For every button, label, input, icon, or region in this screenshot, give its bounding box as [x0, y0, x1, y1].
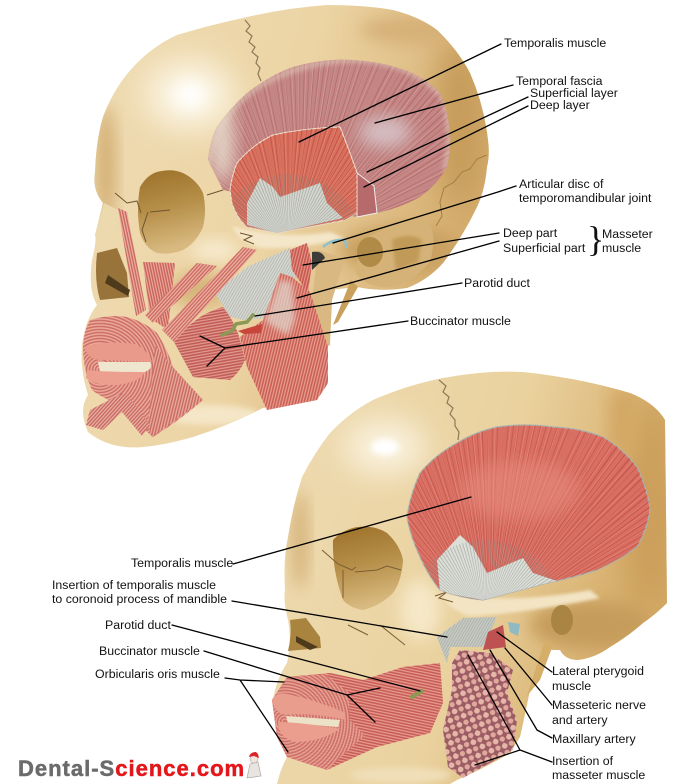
bottom skull: cranium and mandible	[273, 372, 667, 784]
bottom skull: facial sutures	[322, 550, 453, 645]
orbicularis oris and lower facial muscles	[83, 316, 203, 437]
callout: bottom buccinator	[99, 644, 380, 722]
callout: insertion of masseter: Insertion of	[552, 754, 614, 768]
masseter insertion area	[443, 650, 517, 778]
levator anguli fan	[143, 262, 175, 330]
callout: insertion of temporalis: Insertion of temporalis muscle	[52, 578, 216, 592]
label: masseter muscle: Masseter	[602, 227, 653, 241]
top skull: condyle and ramus	[312, 250, 345, 350]
masseter superficial part	[240, 273, 328, 410]
callout: orbicularis oris: Orbicularis oris muscle	[95, 667, 220, 681]
callout: bottom parotid duct	[105, 618, 420, 691]
upper lip	[84, 343, 152, 362]
top temporalis: fibres	[230, 127, 357, 233]
callout: insertion of masseter	[468, 655, 645, 782]
bottom skull: orbit	[333, 527, 403, 610]
top temporalis: tendon	[247, 178, 343, 233]
top skull: facial sutures	[115, 190, 254, 244]
callout: masseteric nerve: and artery	[552, 713, 608, 727]
callout: superficial part: Superficial part	[503, 241, 586, 255]
callout: articular disc: Articular disc of	[519, 177, 604, 191]
mandibular tendon insertion	[437, 617, 497, 663]
callout: bottom temporalis: Temporalis muscle	[131, 556, 233, 570]
bottom facial muscles	[272, 663, 443, 770]
callout: maxillary artery: Maxillary artery	[552, 732, 637, 746]
callout: insertion of temporalis: to coronoid process of mandible	[52, 592, 227, 606]
callout: buccinator muscle	[200, 314, 511, 366]
bottom temporalis muscle	[406, 424, 651, 601]
callout: superficial layer: Superficial layer	[530, 86, 618, 100]
bottom orbicularis rings	[272, 674, 365, 770]
callout: deep part	[303, 226, 558, 265]
callout: parotid duct	[255, 276, 530, 316]
callout: buccinator muscle: Buccinator muscle	[410, 314, 511, 328]
lateral pterygoid muscle	[483, 625, 506, 650]
callout: orbicularis oris	[95, 667, 288, 752]
top skull: base hollows	[392, 236, 422, 270]
masseter tendon	[215, 248, 296, 320]
masseter deep part	[290, 243, 312, 293]
callout: lateral pterygoid	[497, 632, 644, 693]
callout: masseteric nerve	[505, 648, 646, 727]
lower lip	[86, 370, 145, 385]
callout: deep layer: Deep layer	[530, 98, 590, 112]
callout: articular disc: temporomandibular joint	[519, 191, 652, 205]
brace: }	[587, 219, 604, 259]
top temporalis muscle	[230, 126, 358, 234]
top skull illustration	[82, 5, 489, 447]
callout: bottom parotid duct: Parotid duct	[105, 618, 171, 632]
levator labii muscle	[118, 208, 146, 316]
deep layer strip	[340, 127, 377, 217]
callout: bottom buccinator: Buccinator muscle	[99, 644, 200, 658]
bottom skull: mastoid hollow	[551, 605, 573, 635]
top skull: nasal aperture shadow	[105, 275, 130, 296]
top skull: parietal suture	[436, 155, 487, 226]
callout: temporal fascia: Temporal fascia	[516, 74, 603, 88]
bottom temporalis: tendon	[437, 535, 563, 600]
top skull: zygomatic arch	[232, 226, 345, 248]
callout: temporal fascia	[375, 74, 603, 123]
zygomaticus minor muscle	[145, 263, 217, 323]
callout: insertion of masseter: masseter muscle	[552, 768, 645, 782]
parotid duct	[222, 315, 253, 335]
callout: superficial part	[297, 241, 586, 298]
bottom skull: coronal suture	[439, 380, 459, 440]
top skull: mastoid and cranial base	[355, 215, 433, 287]
masseter tendon blend	[265, 280, 295, 335]
chin strand	[86, 392, 150, 436]
icon: doctor	[247, 752, 261, 778]
pterygoid blue structure	[508, 622, 520, 636]
teeth	[98, 362, 151, 372]
callout: lateral pterygoid: Lateral pterygoid	[552, 664, 644, 678]
dark opening behind deep masseter	[312, 252, 325, 270]
bottom skull: shading	[292, 390, 676, 783]
bottom skull: nasal cavity	[288, 618, 321, 651]
bottom skull: zygomatic arch	[440, 590, 600, 616]
top skull: coronal suture	[245, 20, 261, 81]
callout: temporalis muscle	[299, 36, 606, 142]
top skull: mastoid hollow	[357, 237, 383, 267]
label: masseter muscle: muscle	[602, 241, 641, 255]
callout: deep layer	[364, 98, 590, 187]
top skull: styloid process	[333, 280, 358, 325]
callout: masseteric nerve: Masseteric nerve	[552, 698, 646, 712]
bottom teeth	[286, 716, 340, 727]
callouts: top skull	[200, 36, 653, 366]
temporal fascia	[208, 60, 450, 217]
articular disc	[323, 240, 346, 248]
label: masseter muscle	[602, 227, 653, 255]
buccinator muscle	[173, 307, 245, 380]
bottom lower lip	[278, 722, 340, 742]
bottom temporalis: fibres	[407, 425, 650, 600]
bottom skull illustration	[272, 372, 676, 784]
cut parotid vessel	[238, 324, 262, 334]
top skull: shading	[96, 16, 484, 425]
bottom upper lip	[272, 693, 346, 720]
callout: bottom temporalis	[131, 497, 471, 570]
parotid duct stump	[412, 691, 422, 697]
top skull: orbit	[138, 170, 205, 254]
bottom skull: nasal aperture shadow	[296, 636, 318, 650]
depressor strand	[148, 345, 203, 437]
callout: superficial layer	[367, 86, 618, 172]
callouts: bottom skull	[52, 497, 646, 782]
callout: parotid duct: Parotid duct	[464, 276, 530, 290]
callout: insertion of temporalis	[52, 578, 447, 637]
callout: lateral pterygoid: muscle	[552, 679, 591, 693]
bottom skull: styloid process	[527, 640, 553, 696]
top skull: nasal bone	[95, 203, 122, 245]
top skull: cranium and mandible	[82, 5, 489, 447]
callout: articular disc	[333, 177, 652, 243]
top skull: nasal cavity	[96, 248, 129, 300]
logo: Dental-Science.com: Dental-Science.com	[18, 756, 245, 781]
callout: temporalis muscle: Temporalis muscle	[504, 36, 606, 50]
zygomaticus major muscle	[162, 247, 257, 342]
temporal fascia: radiating texture	[208, 60, 450, 217]
callout: maxillary artery	[490, 650, 637, 746]
callout: deep part: Deep part	[503, 226, 558, 240]
